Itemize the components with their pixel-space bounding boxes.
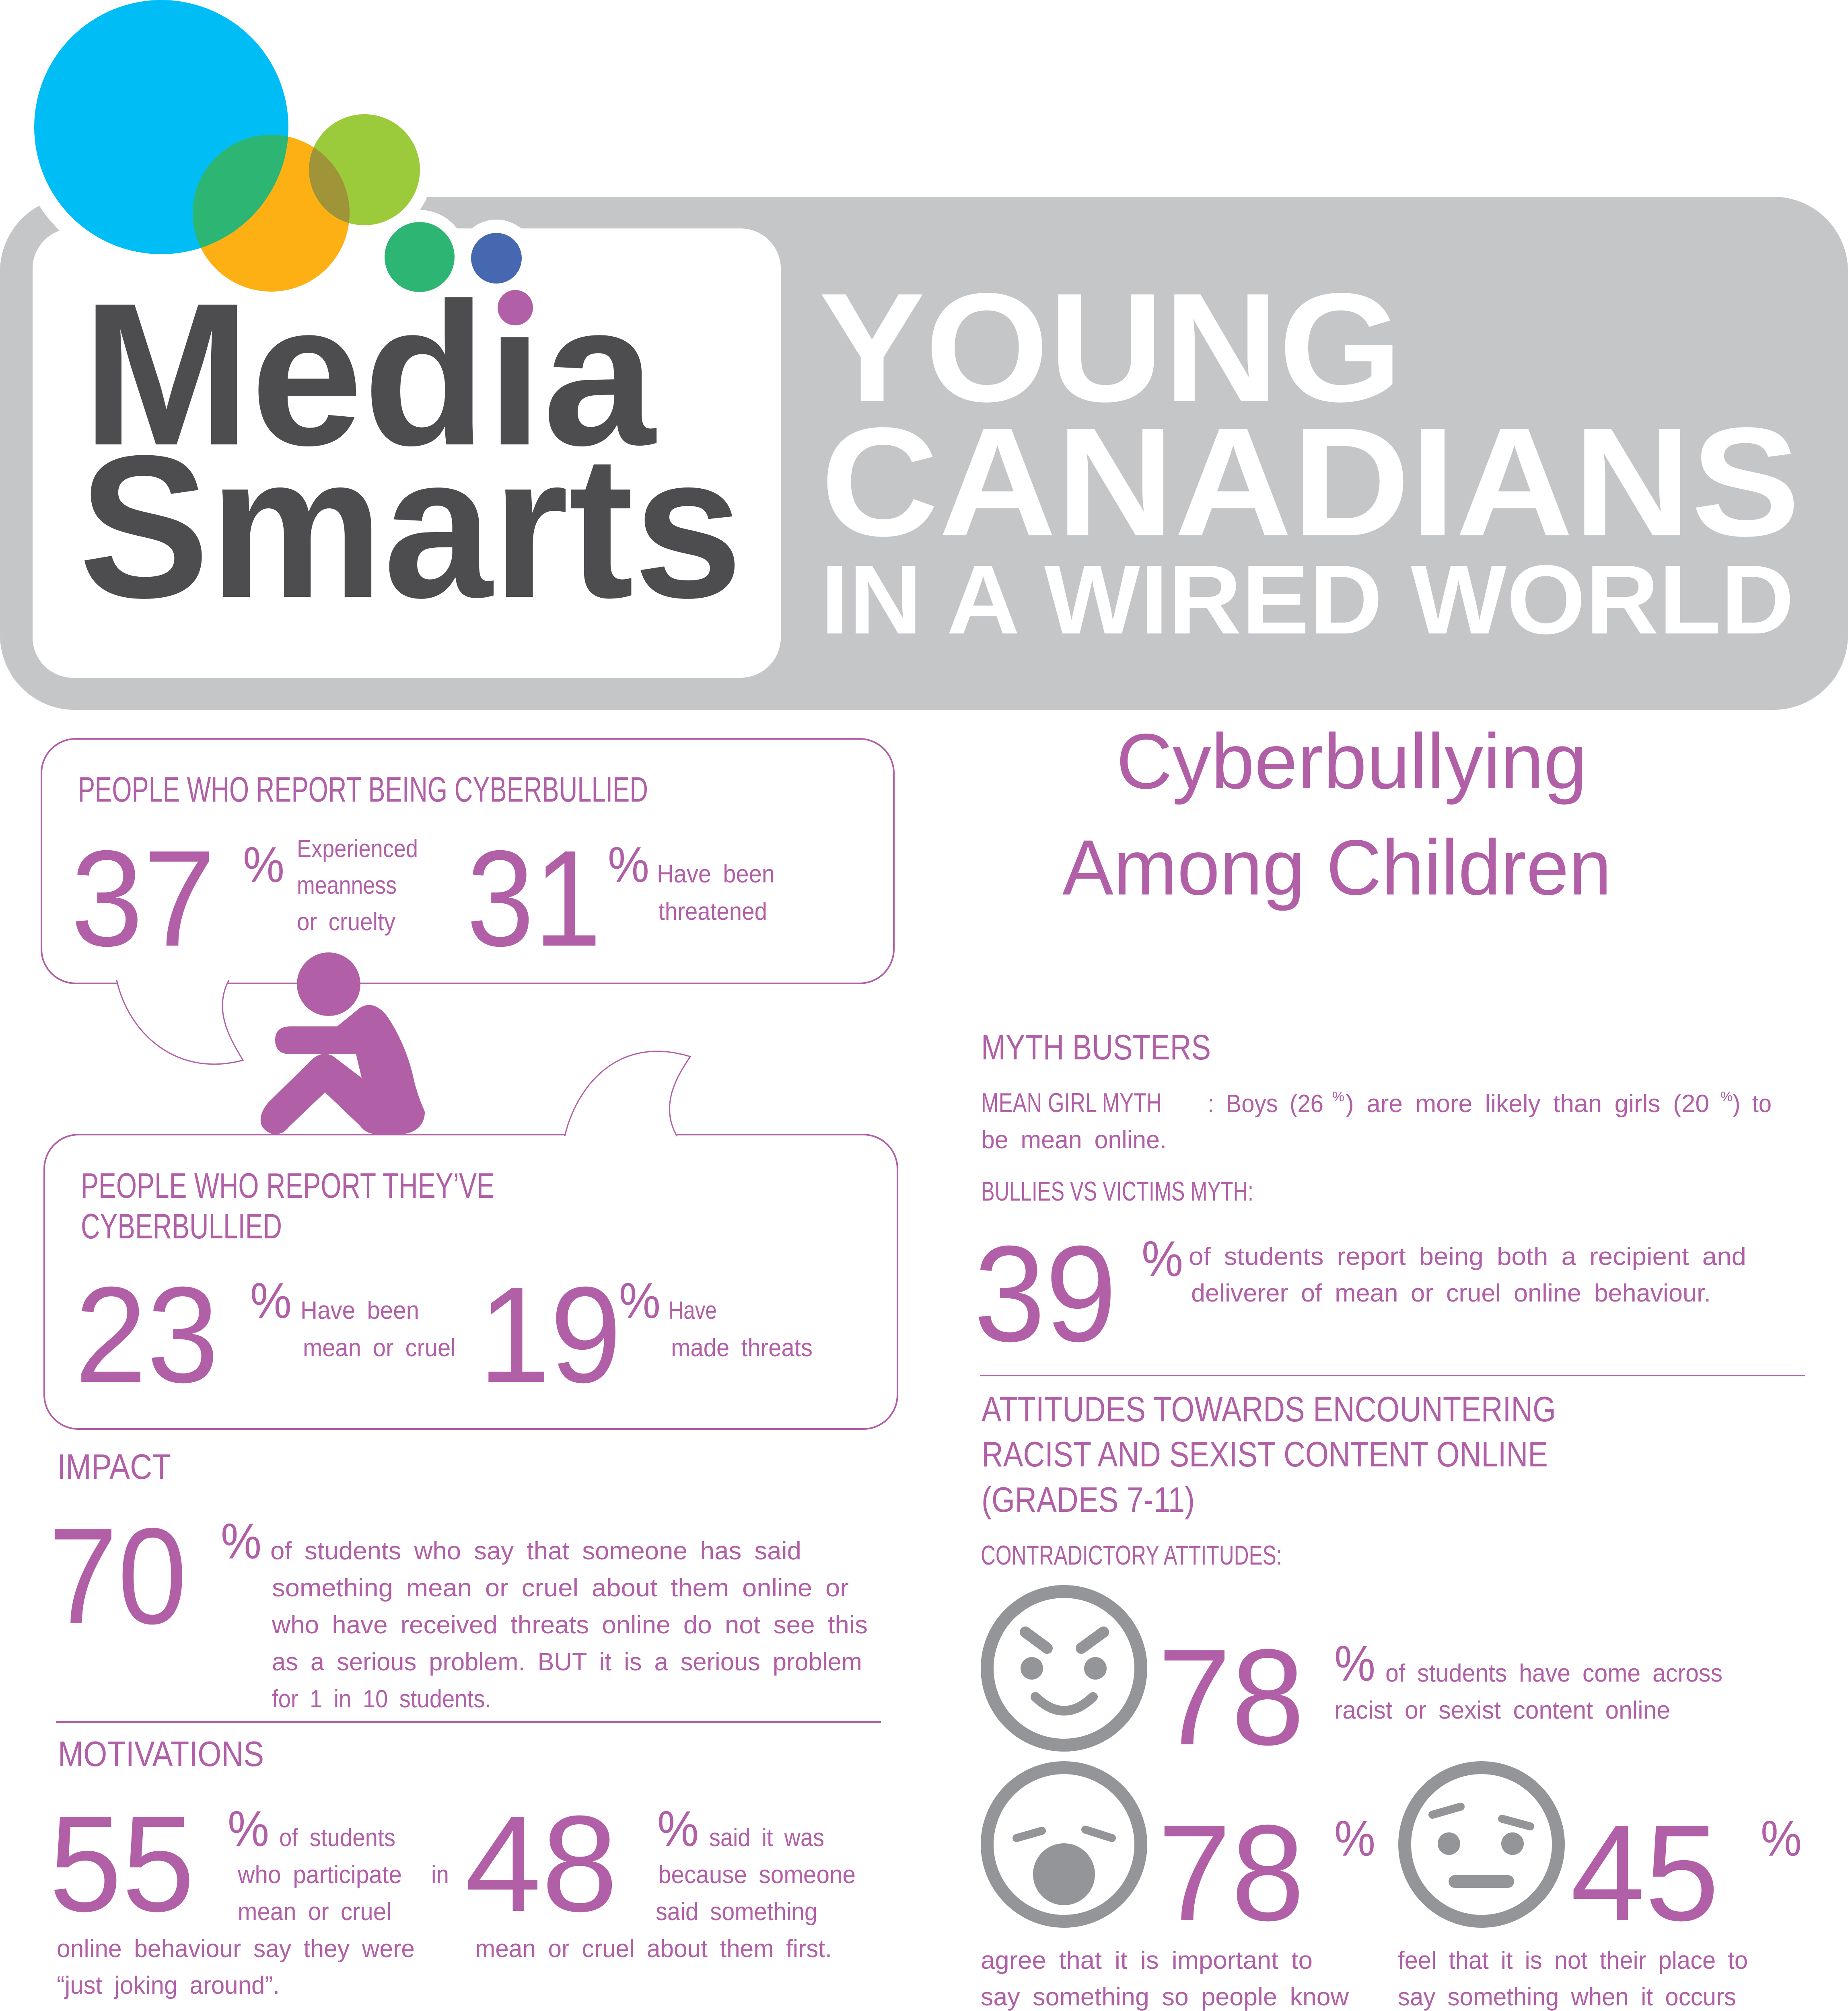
- stat 23: %: [250, 1273, 292, 1329]
- stat 31: 31: [467, 822, 601, 975]
- bubble tail: [117, 980, 243, 1064]
- stat 31: %: [608, 837, 649, 893]
- mean girl myth: ) to: [1733, 1090, 1772, 1118]
- logo i-dot mask: [485, 292, 541, 334]
- icon: yelling face: [987, 1768, 1141, 1921]
- mean girl myth: : Boys (26: [1208, 1090, 1323, 1118]
- stat 39: %: [1142, 1231, 1183, 1287]
- logo wordmark: Smarts: Smarts: [79, 413, 743, 640]
- stat 23: [75, 1258, 456, 1411]
- stat 45: %: [1761, 1811, 1802, 1867]
- stat 78 speak up: [981, 1797, 1375, 2011]
- mean girl myth: %: [1720, 1089, 1733, 1104]
- stat 48: [465, 1787, 856, 1963]
- speech bubble: being cyberbullied: [41, 739, 894, 1064]
- stat 55: %: [228, 1801, 269, 1857]
- stat 55: “just joking around”.: [57, 1972, 280, 1999]
- stat 19: [479, 1258, 813, 1411]
- logo circles halo: [16, 0, 535, 304]
- heading: [982, 1389, 1556, 1520]
- bubble tail: [565, 1051, 690, 1136]
- page subtitle: Cyberbullying: [1116, 718, 1587, 805]
- stat 70: %: [221, 1513, 261, 1569]
- body text: something mean or cruel about them online or: [272, 1574, 849, 1602]
- mean girl myth: [981, 1088, 1772, 1154]
- stat 48: 48: [465, 1787, 618, 1940]
- stat 31: [467, 822, 775, 975]
- section: attitudes: [981, 1389, 1802, 2011]
- stat 55: [49, 1787, 449, 1999]
- page subtitle: [1062, 718, 1611, 911]
- logo colour circles: [34, 0, 533, 325]
- stat 48: mean or cruel about them first.: [475, 1935, 832, 1963]
- section: impact: [48, 1447, 868, 1713]
- stat 78 encountered: racist or sexist content online: [1334, 1696, 1670, 1724]
- stat 37: [71, 822, 418, 975]
- stat 31: Have been: [657, 860, 775, 888]
- mean girl myth: ) are more likely than girls (20: [1346, 1090, 1709, 1118]
- icon: worried face: [1405, 1768, 1558, 1921]
- stat 70: 70: [48, 1500, 187, 1653]
- stat 19: 19: [479, 1258, 621, 1411]
- body text: who have received threats online do not see this: [272, 1611, 868, 1639]
- body text: of students who say that someone has said: [270, 1537, 801, 1565]
- stat 48: said something: [656, 1898, 817, 1926]
- stat 48: %: [657, 1801, 699, 1857]
- heading: ATTITUDES TOWARDS ENCOUNTERING: [982, 1389, 1556, 1429]
- banner title: [819, 261, 1800, 654]
- mean girl myth: MEAN GIRL MYTH: [981, 1088, 1162, 1118]
- stat 37: meanness: [297, 872, 397, 899]
- body text: as a serious problem. BUT it is a serious problem: [272, 1648, 862, 1676]
- stat 78 speak up: say something so people know: [981, 1983, 1349, 2011]
- stat 39: deliverer of mean or cruel online behaviour.: [1191, 1279, 1711, 1307]
- stat 37: Experienced: [297, 835, 418, 863]
- stat 45: 45: [1570, 1797, 1719, 1949]
- stat 55: online behaviour say they were: [57, 1935, 415, 1963]
- stat 39: of students report being both a recipient and: [1189, 1243, 1746, 1271]
- body text: [270, 1537, 868, 1713]
- heading: (GRADES 7-11): [982, 1480, 1195, 1520]
- speech bubble: have cyberbullied: [44, 1051, 897, 1429]
- stat 39: [974, 1217, 1746, 1370]
- stat 19: made threats: [671, 1334, 813, 1362]
- stat 55: 55: [49, 1787, 195, 1940]
- bullies vs victims: BULLIES VS VICTIMS MYTH:: [981, 1176, 1253, 1207]
- logo card: [33, 228, 781, 678]
- stat 55: of students: [279, 1824, 395, 1852]
- heading: IMPACT: [57, 1447, 171, 1487]
- stat 39: 39: [974, 1217, 1117, 1370]
- stat 37: 37: [71, 822, 216, 975]
- stat 78 encountered: of students have come across: [1385, 1659, 1722, 1687]
- banner title: IN A WIRED WORLD: [821, 545, 1794, 654]
- body text: for 1 in 10 students.: [272, 1685, 491, 1713]
- heading: RACIST AND SEXIST CONTENT ONLINE: [982, 1434, 1548, 1474]
- stat 78 encountered: [1158, 1621, 1722, 1774]
- heading: PEOPLE WHO REPORT THEY’VE: [81, 1166, 494, 1205]
- stat 78 speak up: agree that it is important to: [981, 1947, 1313, 1974]
- stat 45: [1398, 1797, 1802, 2011]
- stat 55: mean or cruel: [238, 1898, 391, 1926]
- stat 78 speak up: %: [1334, 1811, 1375, 1867]
- logo wordmark: Media: Media: [82, 261, 656, 488]
- header banner: [0, 0, 1848, 710]
- stat 19: Have: [669, 1297, 717, 1324]
- stat 23: Have been: [300, 1297, 419, 1324]
- stat 19: %: [619, 1273, 661, 1329]
- heading: MOTIVATIONS: [58, 1734, 264, 1774]
- mean girl myth: %: [1332, 1089, 1344, 1104]
- stat 48: said it was: [709, 1824, 824, 1852]
- banner title: YOUNG: [819, 261, 1402, 434]
- icon: sitting person: [261, 952, 425, 1135]
- stat 23: mean or cruel: [303, 1334, 456, 1362]
- section: myth busters: [974, 1027, 1772, 1370]
- stat 48: because someone: [658, 1861, 856, 1889]
- icon: smirking face: [987, 1592, 1141, 1745]
- mean girl myth: be mean online.: [981, 1126, 1167, 1154]
- stat 23: 23: [75, 1258, 219, 1411]
- stat 45: feel that it is not their place to: [1398, 1947, 1748, 1974]
- heading: [81, 1166, 494, 1246]
- heading: PEOPLE WHO REPORT BEING CYBERBULLIED: [78, 769, 648, 809]
- section: motivations: [49, 1734, 856, 1999]
- heading: MYTH BUSTERS: [981, 1027, 1211, 1067]
- stat 78 encountered: 78: [1158, 1621, 1305, 1774]
- stat 37: %: [243, 837, 284, 893]
- stat 37: or cruelty: [297, 908, 395, 936]
- stat 55: who participate: [237, 1861, 402, 1889]
- heading: CYBERBULLIED: [81, 1206, 282, 1246]
- stat 78 encountered: %: [1334, 1636, 1375, 1692]
- page subtitle: Among Children: [1062, 824, 1611, 911]
- stat 78 speak up: 78: [1158, 1797, 1305, 1949]
- banner title: CANADIANS: [821, 395, 1800, 568]
- stat 55: in: [431, 1861, 449, 1889]
- stat 31: threatened: [659, 898, 767, 925]
- stat 45: say something when it occurs: [1398, 1983, 1736, 2011]
- subheading: CONTRADICTORY ATTITUDES:: [981, 1540, 1282, 1571]
